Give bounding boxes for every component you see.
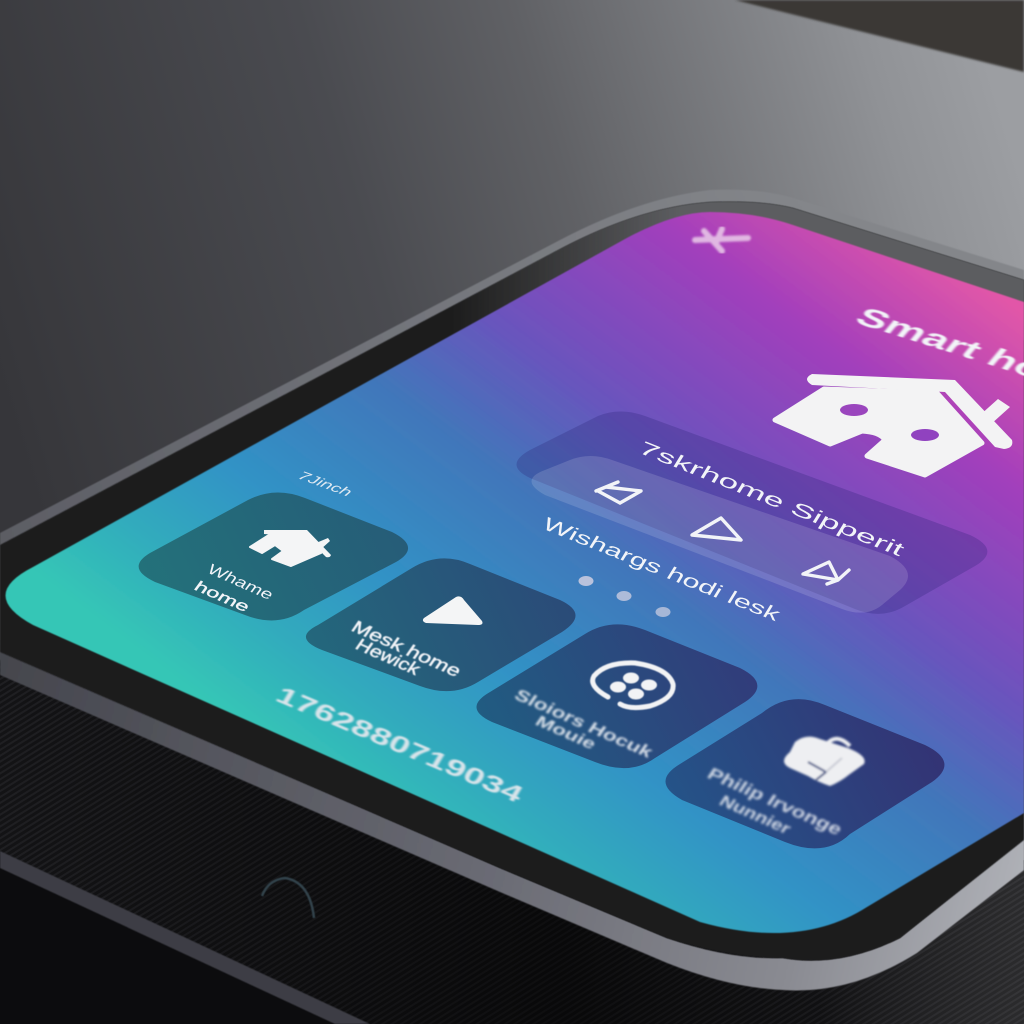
card label: Mouie	[532, 712, 600, 753]
metal rim top	[0, 190, 1024, 860]
icon: asterisk top	[695, 229, 748, 251]
card: Philip Irvonge	[665, 699, 944, 848]
lower body edge	[0, 851, 370, 1024]
bezel sheen at top	[450, 202, 1024, 360]
icon: large house	[775, 374, 1012, 475]
icon: small house	[250, 530, 331, 566]
number line: 1762880719034	[271, 681, 529, 808]
black bezel	[0, 202, 1024, 961]
body shading	[0, 640, 1024, 1024]
screen	[6, 212, 1024, 933]
panel caption: Wishargs hodi lesk	[539, 513, 785, 625]
icon: four dots in ring	[593, 663, 673, 708]
card: Whome home: home	[191, 579, 253, 615]
far edge of table	[735, 0, 1024, 72]
phone body with fabric side	[0, 640, 1024, 1024]
card label: Nunnier	[716, 792, 795, 838]
icon: bag cluster	[784, 737, 865, 786]
card label: Philip Irvonge	[704, 764, 846, 839]
floor shadow	[0, 840, 400, 1024]
card label: Hewick	[352, 635, 425, 679]
panel: media player	[516, 412, 987, 625]
card: Whome home	[139, 492, 408, 620]
metal rim bottom	[0, 650, 1024, 991]
panel title: 7skrhome Sipperit	[635, 437, 909, 560]
icon: next	[803, 562, 849, 584]
dark panel	[516, 412, 987, 614]
card label: Mesk home	[348, 617, 465, 680]
icon: play	[692, 518, 741, 540]
card: Sloiors Hocuk	[476, 624, 757, 768]
card label: Sloiors Hocuk	[511, 686, 657, 761]
light panel	[532, 456, 908, 613]
pagination dots	[578, 576, 670, 617]
card label: Whame	[204, 562, 277, 603]
side speaker mark	[262, 878, 314, 918]
icon: previous	[596, 482, 641, 503]
icon: solid triangle	[423, 596, 482, 625]
card: Mask home	[306, 558, 576, 691]
small label: 7Jinch	[295, 469, 355, 500]
